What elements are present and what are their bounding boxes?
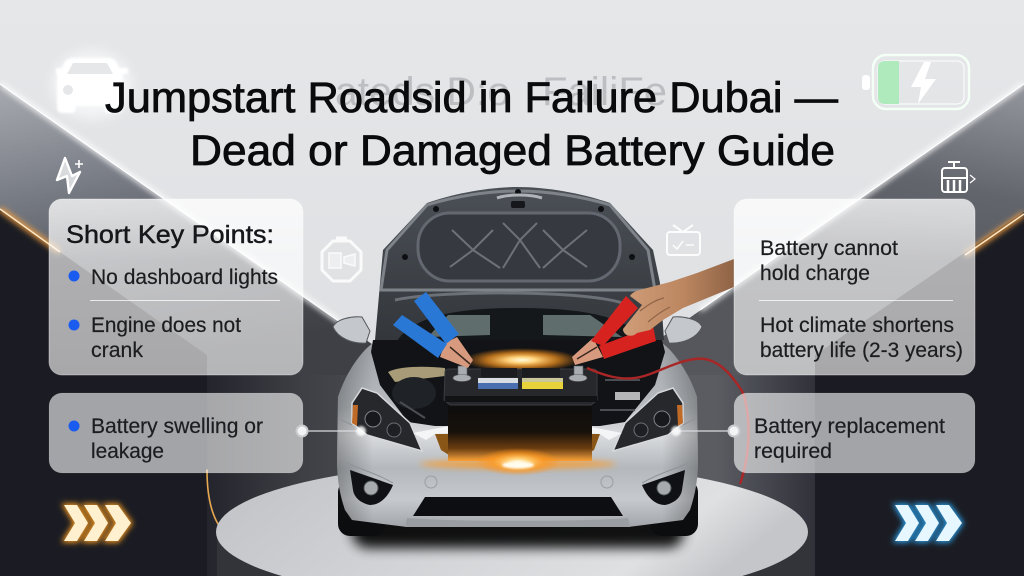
key point: crank: crank [91, 339, 143, 362]
text: hot climate [760, 314, 963, 362]
battery [444, 368, 597, 461]
grille [413, 497, 623, 516]
battery terminals [453, 366, 587, 382]
blue clamps [393, 292, 473, 368]
connector right [671, 426, 734, 436]
red clamps [572, 296, 656, 365]
icon: battery charge [862, 55, 969, 109]
car illustration [333, 187, 748, 548]
panel: replacement required: required [754, 440, 832, 463]
orange light trails [207, 370, 815, 524]
text: hot climate: Hot climate shortens [760, 314, 954, 337]
windshield [395, 308, 648, 344]
mirror left [333, 317, 370, 343]
title [105, 74, 838, 175]
wheels [338, 480, 698, 536]
open hood [375, 187, 664, 340]
title ghost text: ateds D:o [335, 70, 510, 114]
text: cannot hold charge: Battery cannot [760, 237, 898, 260]
panel: replacement required [734, 393, 975, 473]
panel: battery swelling [49, 393, 303, 473]
connector dots [296, 426, 740, 436]
key point: dashboard: No dashboard lights [91, 266, 278, 289]
title ghost text [335, 70, 667, 114]
ground shadow [352, 512, 684, 548]
title ghost text: FailiFe [542, 70, 667, 114]
headlight right [613, 388, 683, 451]
engine bay [371, 340, 665, 426]
icon: car [52, 51, 132, 119]
heading: Short Key Points: [66, 221, 274, 249]
icon: engine warning [322, 238, 361, 281]
hand and arm [623, 259, 734, 336]
fog light left [350, 470, 393, 505]
panel: battery swelling: Battery swelling or [91, 415, 263, 438]
icon: battery tester [942, 162, 975, 192]
platform [216, 462, 812, 576]
panel: battery swelling: leakage [91, 440, 164, 463]
sensors [425, 476, 613, 488]
title: Jumpstart Roadsid in Failure Dubai — [105, 74, 838, 122]
car body [337, 343, 698, 527]
text: hot climate: battery life (2-3 years) [760, 339, 963, 362]
key point: crank [68, 314, 241, 362]
engine detail [388, 367, 640, 418]
arrow: amber chevrons [64, 505, 131, 541]
spark behind battery [464, 348, 580, 372]
fog light right [642, 470, 685, 505]
glow flare [420, 448, 616, 476]
lower lip [405, 518, 630, 527]
panel: battery life [734, 199, 975, 375]
text: cannot hold charge [760, 237, 898, 285]
text: cannot hold charge: hold charge [760, 262, 870, 285]
mirror right [665, 317, 702, 343]
nose accents [413, 426, 622, 455]
arrow: blue chevrons [895, 505, 962, 541]
icon: lightning spark [57, 158, 83, 193]
panel: short key points [49, 199, 303, 375]
icon: dashboard screen [667, 225, 700, 255]
key point: crank: Engine does not [91, 314, 241, 337]
panel: replacement required: Battery replacement [754, 415, 945, 438]
headlight left [352, 388, 422, 451]
connector left [302, 426, 366, 436]
red cable [587, 359, 748, 484]
title: Dead or Damaged Battery Guide [190, 127, 835, 175]
